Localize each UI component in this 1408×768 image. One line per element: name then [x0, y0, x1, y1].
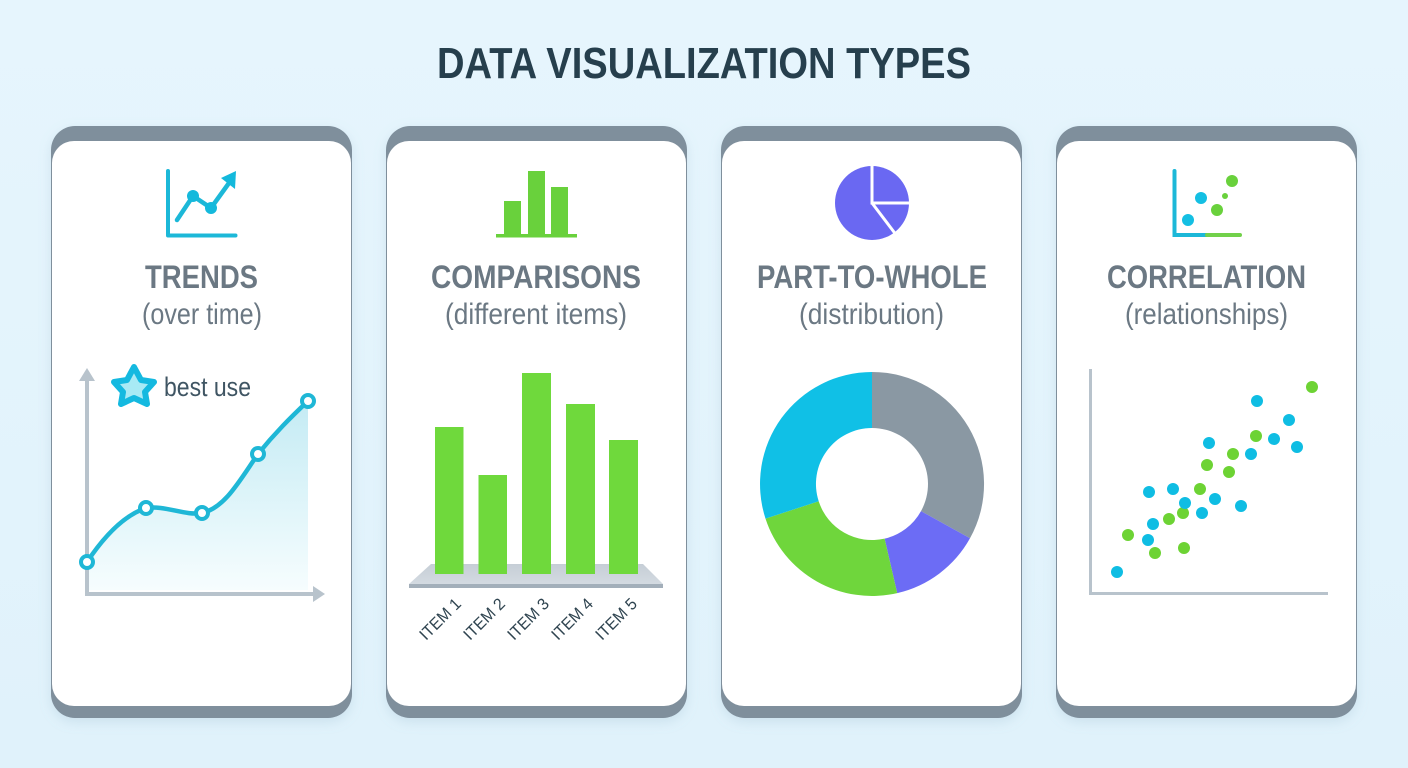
heading: comparisons: COMPARISONS	[431, 259, 641, 295]
icon: scatter plot	[1174, 171, 1240, 235]
panel: part-to-whole	[721, 126, 1022, 718]
icon: trend line	[168, 171, 236, 236]
heading: trends: TRENDS	[145, 259, 258, 295]
panel: correlation	[1056, 126, 1357, 718]
panel: comparisons	[386, 126, 687, 718]
panel: trends	[51, 126, 352, 718]
heading: part-to-whole: PART-TO-WHOLE	[757, 259, 987, 295]
icon: star	[114, 367, 154, 404]
bar chart: ITEM 4	[548, 595, 597, 644]
scatter chart	[1090, 369, 1328, 594]
bar chart	[409, 373, 663, 644]
subheading: different items: (different items)	[445, 298, 627, 331]
donut chart	[760, 372, 984, 596]
bar chart: ITEM 3	[504, 595, 553, 644]
line chart	[79, 368, 325, 602]
icon: pie chart	[835, 162, 912, 240]
title: DATA VISUALIZATION TYPES	[437, 39, 971, 88]
label: best use: best use	[164, 372, 251, 402]
bar chart: ITEM 1	[416, 595, 465, 644]
heading: correlation: CORRELATION	[1107, 259, 1306, 295]
subheading: over time: (over time)	[142, 298, 262, 331]
icon: bar chart	[496, 171, 577, 238]
subheading: distribution: (distribution)	[799, 298, 944, 331]
subheading: relationships: (relationships)	[1125, 298, 1288, 331]
bar chart: ITEM 5	[592, 595, 641, 644]
bar chart: ITEM 2	[460, 595, 509, 644]
